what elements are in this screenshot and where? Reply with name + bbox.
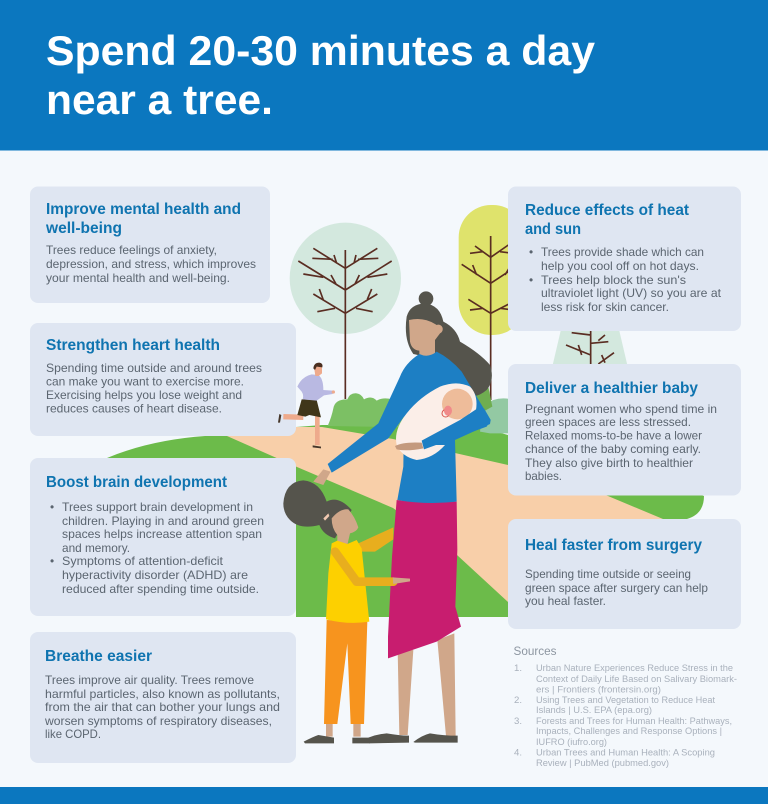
body text: reduces causes of heart disease. (46, 402, 222, 416)
bullet list: children. Playing in and around green (62, 514, 264, 528)
body text (46, 243, 256, 285)
bullet list: Trees provide shade which can (541, 245, 704, 259)
body text: They also give birth to healthier (525, 456, 693, 470)
card: boost brain development (30, 458, 296, 616)
sources list: ers | Frontiers (frontersin.org) (536, 684, 661, 696)
sources list: 1. (514, 663, 522, 674)
body text: Trees reduce feelings of anxiety, (46, 243, 217, 257)
body text: harmful particles, also known as pollutants, (45, 687, 280, 701)
sources (514, 644, 737, 769)
illustration: runner (278, 363, 335, 448)
bullet list: reduced after spending time outside. (62, 582, 259, 596)
sources list: Urban Nature Experiences Reduce Stress in the (536, 663, 733, 674)
mother skirt (388, 500, 461, 658)
body text: green space after surgery can help (525, 581, 708, 595)
background trees (290, 205, 525, 400)
mother face (409, 319, 443, 357)
title: Spend 20-30 minutes a day (46, 27, 596, 74)
sources list: Review | PubMed (pubmed.gov) (536, 758, 669, 769)
sources list: 3. (514, 716, 522, 727)
bullet list: help you cool off on hot days. (541, 259, 699, 273)
tree: far right pale (553, 327, 627, 365)
body text: Trees improve air quality. Trees remove (45, 673, 254, 687)
card: deliver a healthier baby (508, 364, 741, 496)
footer band (0, 787, 768, 804)
bullet list: Symptoms of attention-deficit (62, 554, 224, 568)
body text: Exercising helps you lose weight and (46, 388, 242, 402)
body text: can make you want to exercise more. (46, 374, 244, 388)
illustration: mother and baby (328, 291, 492, 743)
ground: hills and path (107, 425, 704, 617)
heading: and sun (525, 221, 581, 238)
card: improve mental health (30, 186, 270, 303)
tree: yellow (459, 205, 525, 400)
sources list: Islands | U.S. EPA (epa.org) (536, 705, 652, 716)
body text: like COPD. (45, 727, 101, 741)
card: heal faster from surgery (508, 519, 741, 629)
mother right sleeve (422, 408, 491, 449)
heading: Breathe easier (45, 648, 152, 665)
heading: Strengthen heart health (46, 337, 220, 354)
bullet list: • (50, 554, 54, 568)
pacifier (442, 406, 452, 417)
bushes (328, 387, 513, 433)
bullet list: Trees help block the sun's (541, 273, 686, 287)
mother hand (395, 442, 423, 450)
title: near a tree. (46, 76, 273, 123)
card: strengthen heart health (30, 323, 296, 436)
body text: chance of the baby coming early. (525, 442, 701, 456)
bullet list: spaces helps increase attention span (62, 527, 262, 541)
bullet list: and memory. (62, 541, 130, 555)
body text: Spending time outside or seeing (525, 567, 691, 581)
bullet list: • (529, 245, 533, 259)
body text: green spaces are less stressed. (525, 415, 691, 429)
bullet list: • (529, 273, 533, 287)
body text: babies. (525, 469, 562, 483)
body text: Spending time outside and around trees (46, 361, 262, 375)
sources list: Using Trees and Vegetation to Reduce Heat (536, 695, 715, 706)
body text (525, 567, 708, 608)
heading: Deliver a healthier baby (525, 380, 698, 397)
body text: depression, and stress, which improves (46, 257, 256, 271)
child far arm (358, 527, 393, 552)
mother legs (398, 633, 456, 736)
sources heading: Sources (514, 644, 556, 658)
heading (525, 202, 689, 238)
child near arm (335, 552, 393, 582)
sources list: Impacts, Challenges and Response Options | (536, 726, 722, 737)
body text: Pregnant women who spend time in (525, 402, 717, 416)
sources list: 4. (514, 748, 522, 758)
sources list: Forests and Trees for Human Health: Pathways, (536, 716, 732, 727)
body text: your mental health and well-being. (46, 271, 230, 285)
hair tie (323, 513, 329, 521)
heading (45, 201, 241, 237)
body text: from the air that can bother your lungs and (45, 700, 280, 714)
child hand (393, 577, 410, 584)
child legs (326, 723, 361, 737)
body text (525, 402, 717, 483)
bullet list: Trees support brain development in (62, 500, 253, 514)
child shirt (326, 540, 369, 623)
illustration: child (283, 469, 410, 743)
body text: worsen symptoms of respiratory diseases, (44, 714, 272, 728)
bullet list: ultraviolet light (UV) so you are at (541, 286, 722, 300)
heading: Improve mental health and (46, 201, 241, 218)
mother hand on head (313, 469, 331, 485)
bullet list: • (50, 500, 54, 514)
child shoes (304, 735, 370, 743)
mother hair (406, 291, 492, 396)
card: breathe easier (30, 632, 296, 763)
sources list: Context of Daily Life Based on Salivary Biomark- (536, 674, 737, 685)
heading: Reduce effects of heat (525, 202, 689, 219)
baby head (442, 389, 473, 419)
card: reduce effects of heat and sun (508, 186, 741, 331)
heading: well-being (45, 220, 122, 237)
body text (46, 361, 262, 416)
bullet list (529, 245, 722, 314)
baby swaddle (396, 383, 477, 460)
heading: Boost brain development (46, 474, 227, 491)
sources list: 2. (514, 695, 522, 706)
body text (44, 673, 280, 741)
sources list (514, 663, 737, 769)
title (46, 27, 596, 123)
bullet list (50, 500, 264, 596)
body text: Relaxed moms-to-be have a lower (525, 428, 702, 442)
sources list: IUFRO (iufro.org) (536, 737, 607, 748)
body text: you heal faster. (525, 594, 606, 608)
child pants (324, 620, 367, 724)
heading: Heal faster from surgery (525, 537, 702, 554)
tree: round green (290, 223, 401, 399)
child face (332, 509, 358, 545)
header banner (0, 0, 768, 150)
sources list: Urban Trees and Human Health: A Scoping (536, 748, 715, 758)
mother sweater (328, 352, 491, 504)
bullet list: less risk for skin cancer. (541, 300, 669, 314)
bullet list: hyperactivity disorder (ADHD) are (62, 568, 248, 582)
mother shoes (368, 733, 458, 743)
child hair (283, 480, 352, 538)
